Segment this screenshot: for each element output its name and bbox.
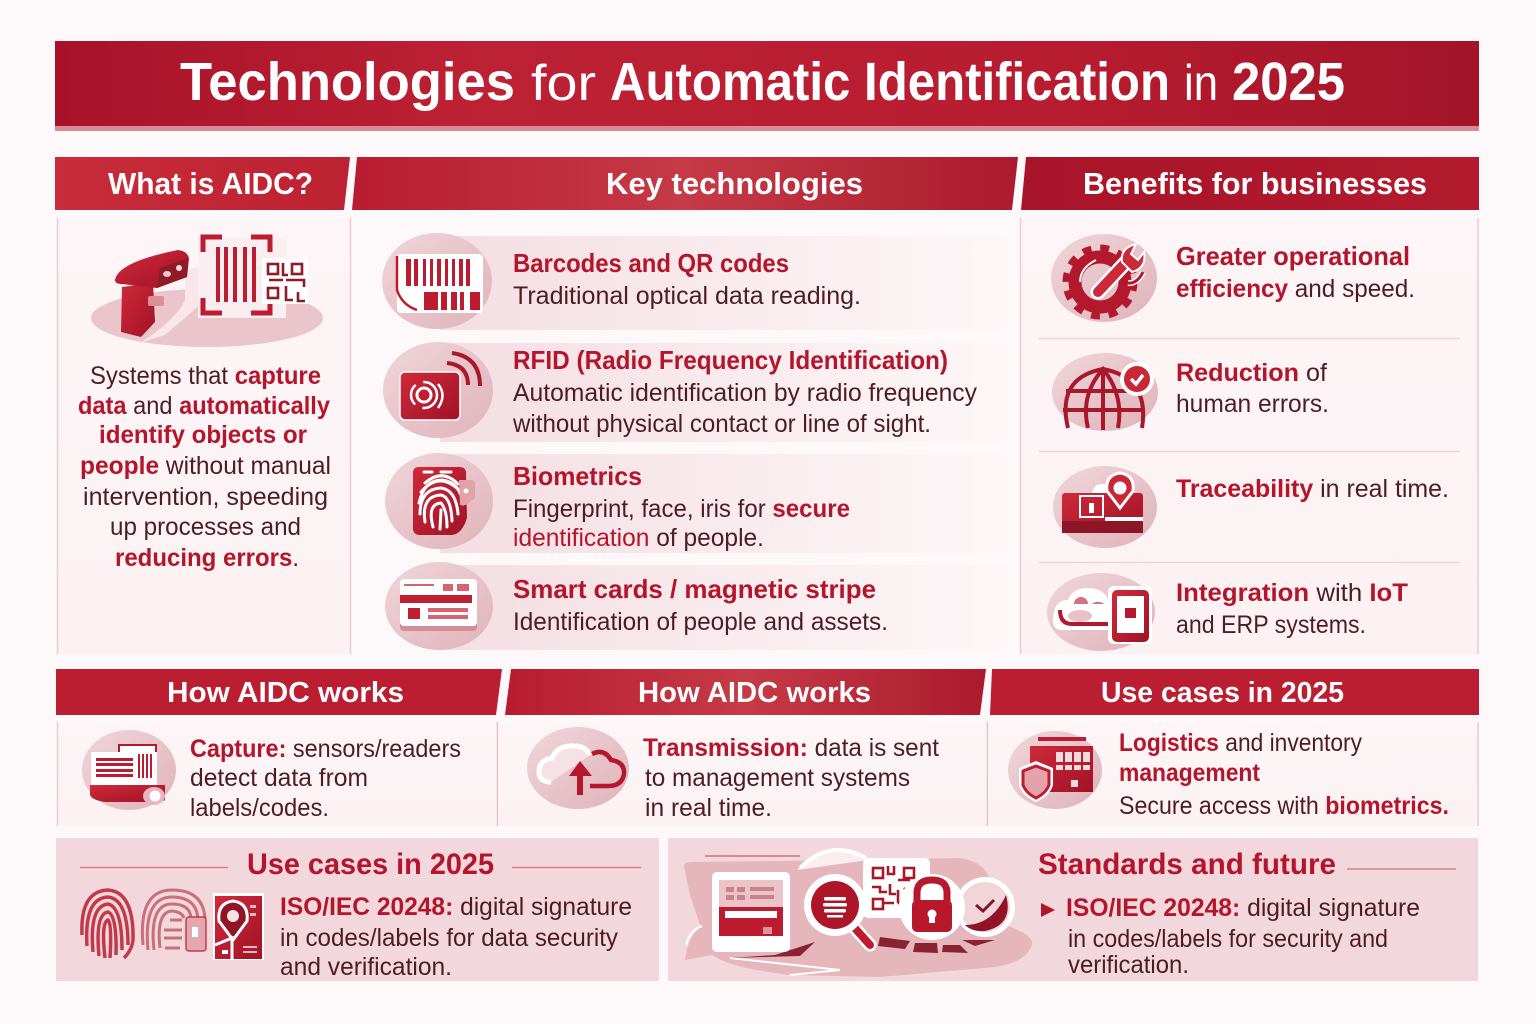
row: integration <box>1047 573 1408 651</box>
icon: cloud and tablet <box>1047 573 1155 651</box>
text: errors: Reduction of <box>1176 359 1327 387</box>
text: Transmission: in real time. <box>645 794 772 822</box>
text: Barcodes: Traditional optical data reading. <box>513 282 861 310</box>
text: AIDC definition: intervention, speeding <box>83 483 328 511</box>
text: Capture: detect data from <box>190 764 368 792</box>
text: AIDC definition: people without manual <box>80 452 331 480</box>
title banner: Technologies <box>180 52 515 112</box>
text: Barcodes <box>513 248 861 310</box>
icon: smart card <box>385 562 493 650</box>
icon: fingerprint and card <box>142 890 206 951</box>
header: How AIDC works (transmission): How AIDC works <box>638 677 871 709</box>
panel: Key technologies <box>382 233 1010 650</box>
header: Use cases in 2025 <box>990 669 1479 715</box>
text: ISO/IEC 20248: ISO/IEC 20248: digital signature <box>280 893 632 921</box>
header: How AIDC works (capture): How AIDC works <box>167 677 404 709</box>
text: Biometrics: Fingerprint, face, iris for secure <box>513 495 850 523</box>
icon: reader and document <box>82 730 176 810</box>
text: Smart cards: Identification of people and assets. <box>513 608 888 636</box>
text: AIDC definition: data and automatically <box>78 392 330 420</box>
header: Benefits for businesses: Benefits for businesses <box>1083 166 1427 201</box>
text: Transmission: to management systems <box>645 764 910 792</box>
text: efficiency: Greater operational <box>1176 241 1410 271</box>
text: Biometrics: Biometrics <box>513 461 642 491</box>
text: Biometrics: identification of people. <box>513 524 764 552</box>
text: AIDC definition: reducing errors. <box>115 544 299 572</box>
header: Key technologies: Key technologies <box>606 166 863 201</box>
row: Barcodes and QR codes <box>382 233 1010 330</box>
text: ISO/IEC 20248 <box>1066 894 1420 979</box>
text: Logistics: Secure access with biometrics. <box>1119 792 1449 820</box>
icon: barcode scanner reading codes <box>91 237 323 347</box>
row: Smart cards <box>385 562 1010 650</box>
panel: Capture <box>57 722 498 826</box>
title banner: Automatic Identification <box>610 52 1170 112</box>
header: Key technologies <box>352 157 1018 210</box>
text: Barcodes: Barcodes and QR codes <box>513 248 789 278</box>
text: efficiency: efficiency and speed. <box>1176 275 1415 303</box>
header: Benefits for businesses <box>1021 157 1479 210</box>
text: RFID: without physical contact or line of sight. <box>512 410 931 438</box>
title banner: 2025 <box>1232 52 1345 112</box>
header: What is AIDC <box>55 157 350 210</box>
text: ISO/IEC 20248: in codes/labels for security and <box>1068 925 1388 953</box>
panel: Standards and future <box>668 838 1478 981</box>
text: Logistics <box>1119 729 1449 820</box>
text: RFID: Automatic identification by radio frequency <box>513 379 977 407</box>
text: ISO/IEC 20248: in codes/labels for data security <box>280 924 618 952</box>
text: efficiency <box>1176 241 1415 303</box>
text: Logistics: management <box>1119 759 1261 787</box>
row: efficiency <box>1051 234 1415 322</box>
panel: Logistics <box>988 722 1478 826</box>
icon: fingerprint <box>385 453 493 549</box>
text: errors: human errors. <box>1176 390 1329 418</box>
row: errors <box>1052 353 1329 431</box>
row: Biometrics <box>385 453 1010 553</box>
icon: fingerprint <box>82 890 133 958</box>
text: Smart cards <box>513 574 888 636</box>
text: traceability: Traceability in real time. <box>1176 475 1449 503</box>
text: ISO/IEC 20248 <box>280 893 632 981</box>
text: integration <box>1176 579 1408 639</box>
header: Use cases in 2025: Use cases in 2025 <box>1101 677 1344 709</box>
text: RFID <box>512 345 977 438</box>
heading: Standards and future: Standards and future <box>1038 848 1336 881</box>
title banner: for <box>531 55 596 111</box>
text: AIDC definition <box>78 362 331 572</box>
text: AIDC definition: Systems that capture <box>90 362 321 390</box>
text: AIDC definition: identify objects or <box>99 421 307 449</box>
icon: gear and wrench <box>1051 234 1157 322</box>
header: How AIDC works (capture) <box>56 669 502 715</box>
icon: warehouse and shield <box>1008 731 1102 809</box>
text: ISO/IEC 20248: ISO/IEC 20248: digital signature <box>1066 894 1420 922</box>
text: Smart cards: Smart cards / magnetic stripe <box>513 574 876 604</box>
panel: Benefits <box>1020 218 1478 654</box>
illustration: security and verification <box>684 850 1032 977</box>
text: integration: and ERP systems. <box>1176 611 1366 639</box>
row: RFID <box>383 342 1010 442</box>
icon: globe with check <box>1052 353 1158 431</box>
text: Capture: Capture: sensors/readers <box>190 735 461 763</box>
text: Biometrics <box>513 461 850 552</box>
text: ISO/IEC 20248: and verification. <box>280 953 452 981</box>
header: How AIDC works (transmission) <box>505 669 986 715</box>
text: Transmission <box>643 734 939 822</box>
text: integration: Integration with IoT <box>1176 579 1408 607</box>
icon: barcodes <box>382 233 492 329</box>
row: traceability <box>1053 466 1449 548</box>
text: Capture <box>190 735 461 822</box>
arrow: bullet <box>1041 903 1055 917</box>
icon: card with location pin <box>1053 466 1157 548</box>
text: Logistics: Logistics and inventory <box>1119 729 1362 757</box>
text: RFID: RFID (Radio Frequency Identification) <box>513 345 948 375</box>
title banner <box>55 41 1479 131</box>
panel: Transmission <box>498 722 988 826</box>
text: errors <box>1176 359 1329 418</box>
title banner: in <box>1184 55 1218 111</box>
text: Transmission: Transmission: data is sent <box>643 734 939 762</box>
icon: RFID <box>383 342 493 438</box>
panel: What is AIDC <box>57 218 350 654</box>
panel: Use cases in 2025 <box>56 838 659 981</box>
text: Capture: labels/codes. <box>190 794 329 822</box>
text: ISO/IEC 20248: verification. <box>1068 951 1189 979</box>
header: What is AIDC: What is AIDC? <box>108 166 313 201</box>
text: AIDC definition: up processes and <box>110 513 301 541</box>
icon: cloud upload <box>527 727 629 809</box>
icon: location tag <box>213 893 264 960</box>
heading: Use cases in 2025: Use cases in 2025 <box>247 848 494 881</box>
